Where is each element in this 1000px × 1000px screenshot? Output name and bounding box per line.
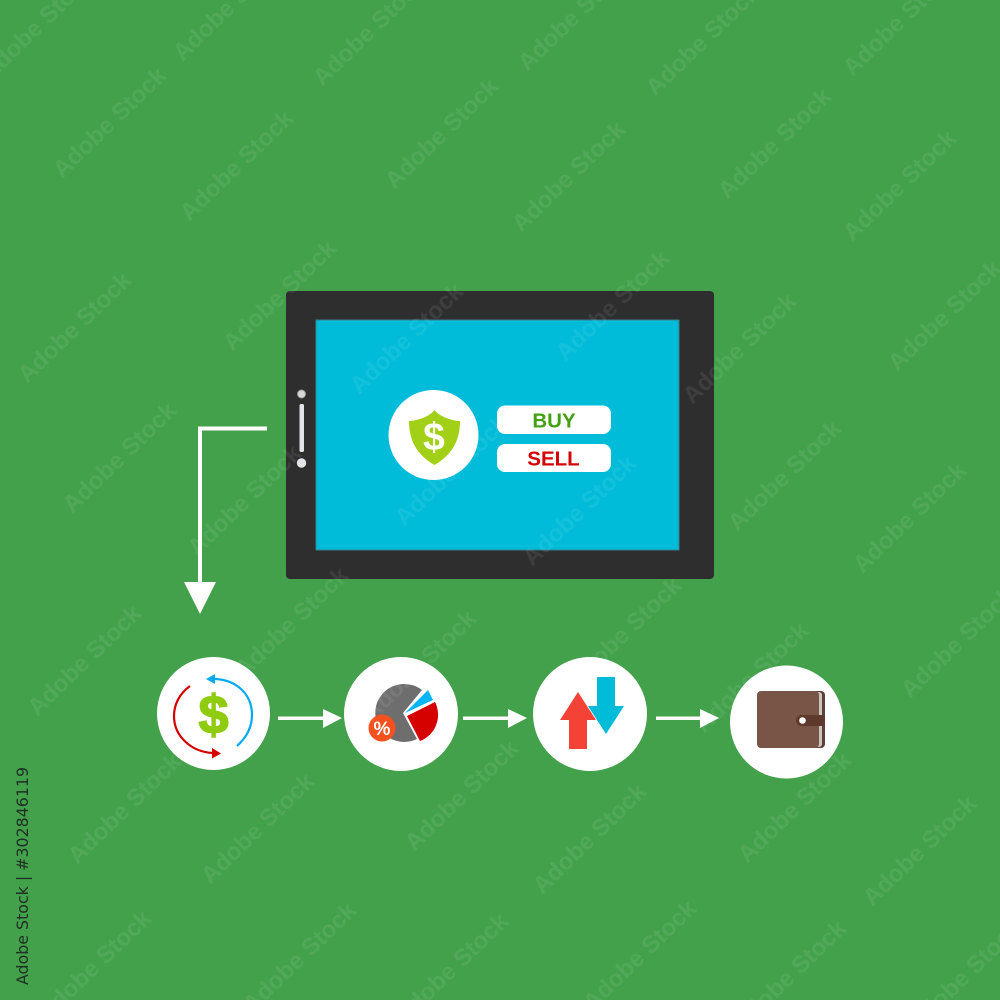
- watermark pattern: Adobe Stock: [551, 244, 675, 366]
- step 3: up and down arrows icon: [533, 657, 647, 771]
- watermark pattern: Adobe Stock: [48, 61, 172, 183]
- tablet body: [286, 291, 714, 579]
- tablet: [286, 291, 714, 579]
- watermark pattern: Adobe Stock: [518, 449, 642, 571]
- watermark pattern: Adobe Stock: [848, 456, 972, 578]
- watermark pattern: Adobe Stock: [183, 439, 307, 561]
- watermark pattern: Adobe Stock: [858, 789, 982, 911]
- shield icon badge: $: [423, 416, 445, 459]
- watermark pattern: Adobe Stock: [196, 767, 320, 889]
- arrow: step 3 to 4: [656, 709, 719, 728]
- watermark pattern: Adobe Stock: [13, 266, 137, 388]
- arrow: step 1 to 2: [278, 709, 342, 728]
- sell button: [497, 444, 611, 472]
- watermark pattern: Adobe Stock: [175, 104, 299, 226]
- side stock id text: Adobe Stock | #302846119: [13, 767, 32, 985]
- watermark pattern: Adobe Stock: [400, 734, 524, 856]
- watermark pattern: Adobe Stock: [678, 287, 802, 409]
- watermark pattern: Adobe Stock: [723, 414, 847, 536]
- sell button: SELL: [527, 448, 580, 470]
- step 1: dollar exchange icon: [157, 657, 270, 770]
- tablet screen: [316, 320, 679, 550]
- step 2: pie chart icon: [344, 657, 458, 771]
- step 1: dollar exchange icon: $: [198, 685, 229, 745]
- watermark pattern: Adobe Stock: [733, 746, 857, 868]
- watermark pattern: Adobe Stock: [358, 604, 482, 726]
- shield icon badge: [388, 390, 478, 480]
- watermark pattern: Adobe Stock: [230, 561, 354, 683]
- watermark pattern: Adobe Stock: [507, 115, 631, 237]
- watermark pattern: Adobe Stock: [380, 72, 504, 194]
- watermark pattern: Adobe Stock: [218, 234, 342, 356]
- watermark pattern: Adobe Stock: [528, 777, 652, 899]
- step 2: pie chart icon: %: [374, 719, 391, 740]
- arrow: step 2 to 3: [463, 709, 527, 728]
- watermark pattern: Adobe Stock: [58, 396, 182, 518]
- tablet side buttons: [297, 390, 306, 468]
- watermark pattern: Adobe Stock: [345, 277, 469, 399]
- watermark pattern: Adobe Stock: [23, 599, 147, 721]
- step 4: wallet icon: [730, 666, 843, 778]
- watermark pattern: Adobe Stock: [563, 571, 687, 693]
- buy button: BUY: [532, 410, 576, 432]
- watermark pattern: Adobe Stock: [690, 616, 814, 738]
- watermark pattern: Adobe Stock: [390, 409, 514, 531]
- watermark pattern: Adobe Stock: [63, 747, 187, 869]
- watermark pattern: Adobe Stock: [713, 82, 837, 204]
- watermark pattern: Adobe Stock: [838, 124, 962, 246]
- buy button: [497, 406, 611, 434]
- arrow: tablet to first step: [184, 428, 267, 614]
